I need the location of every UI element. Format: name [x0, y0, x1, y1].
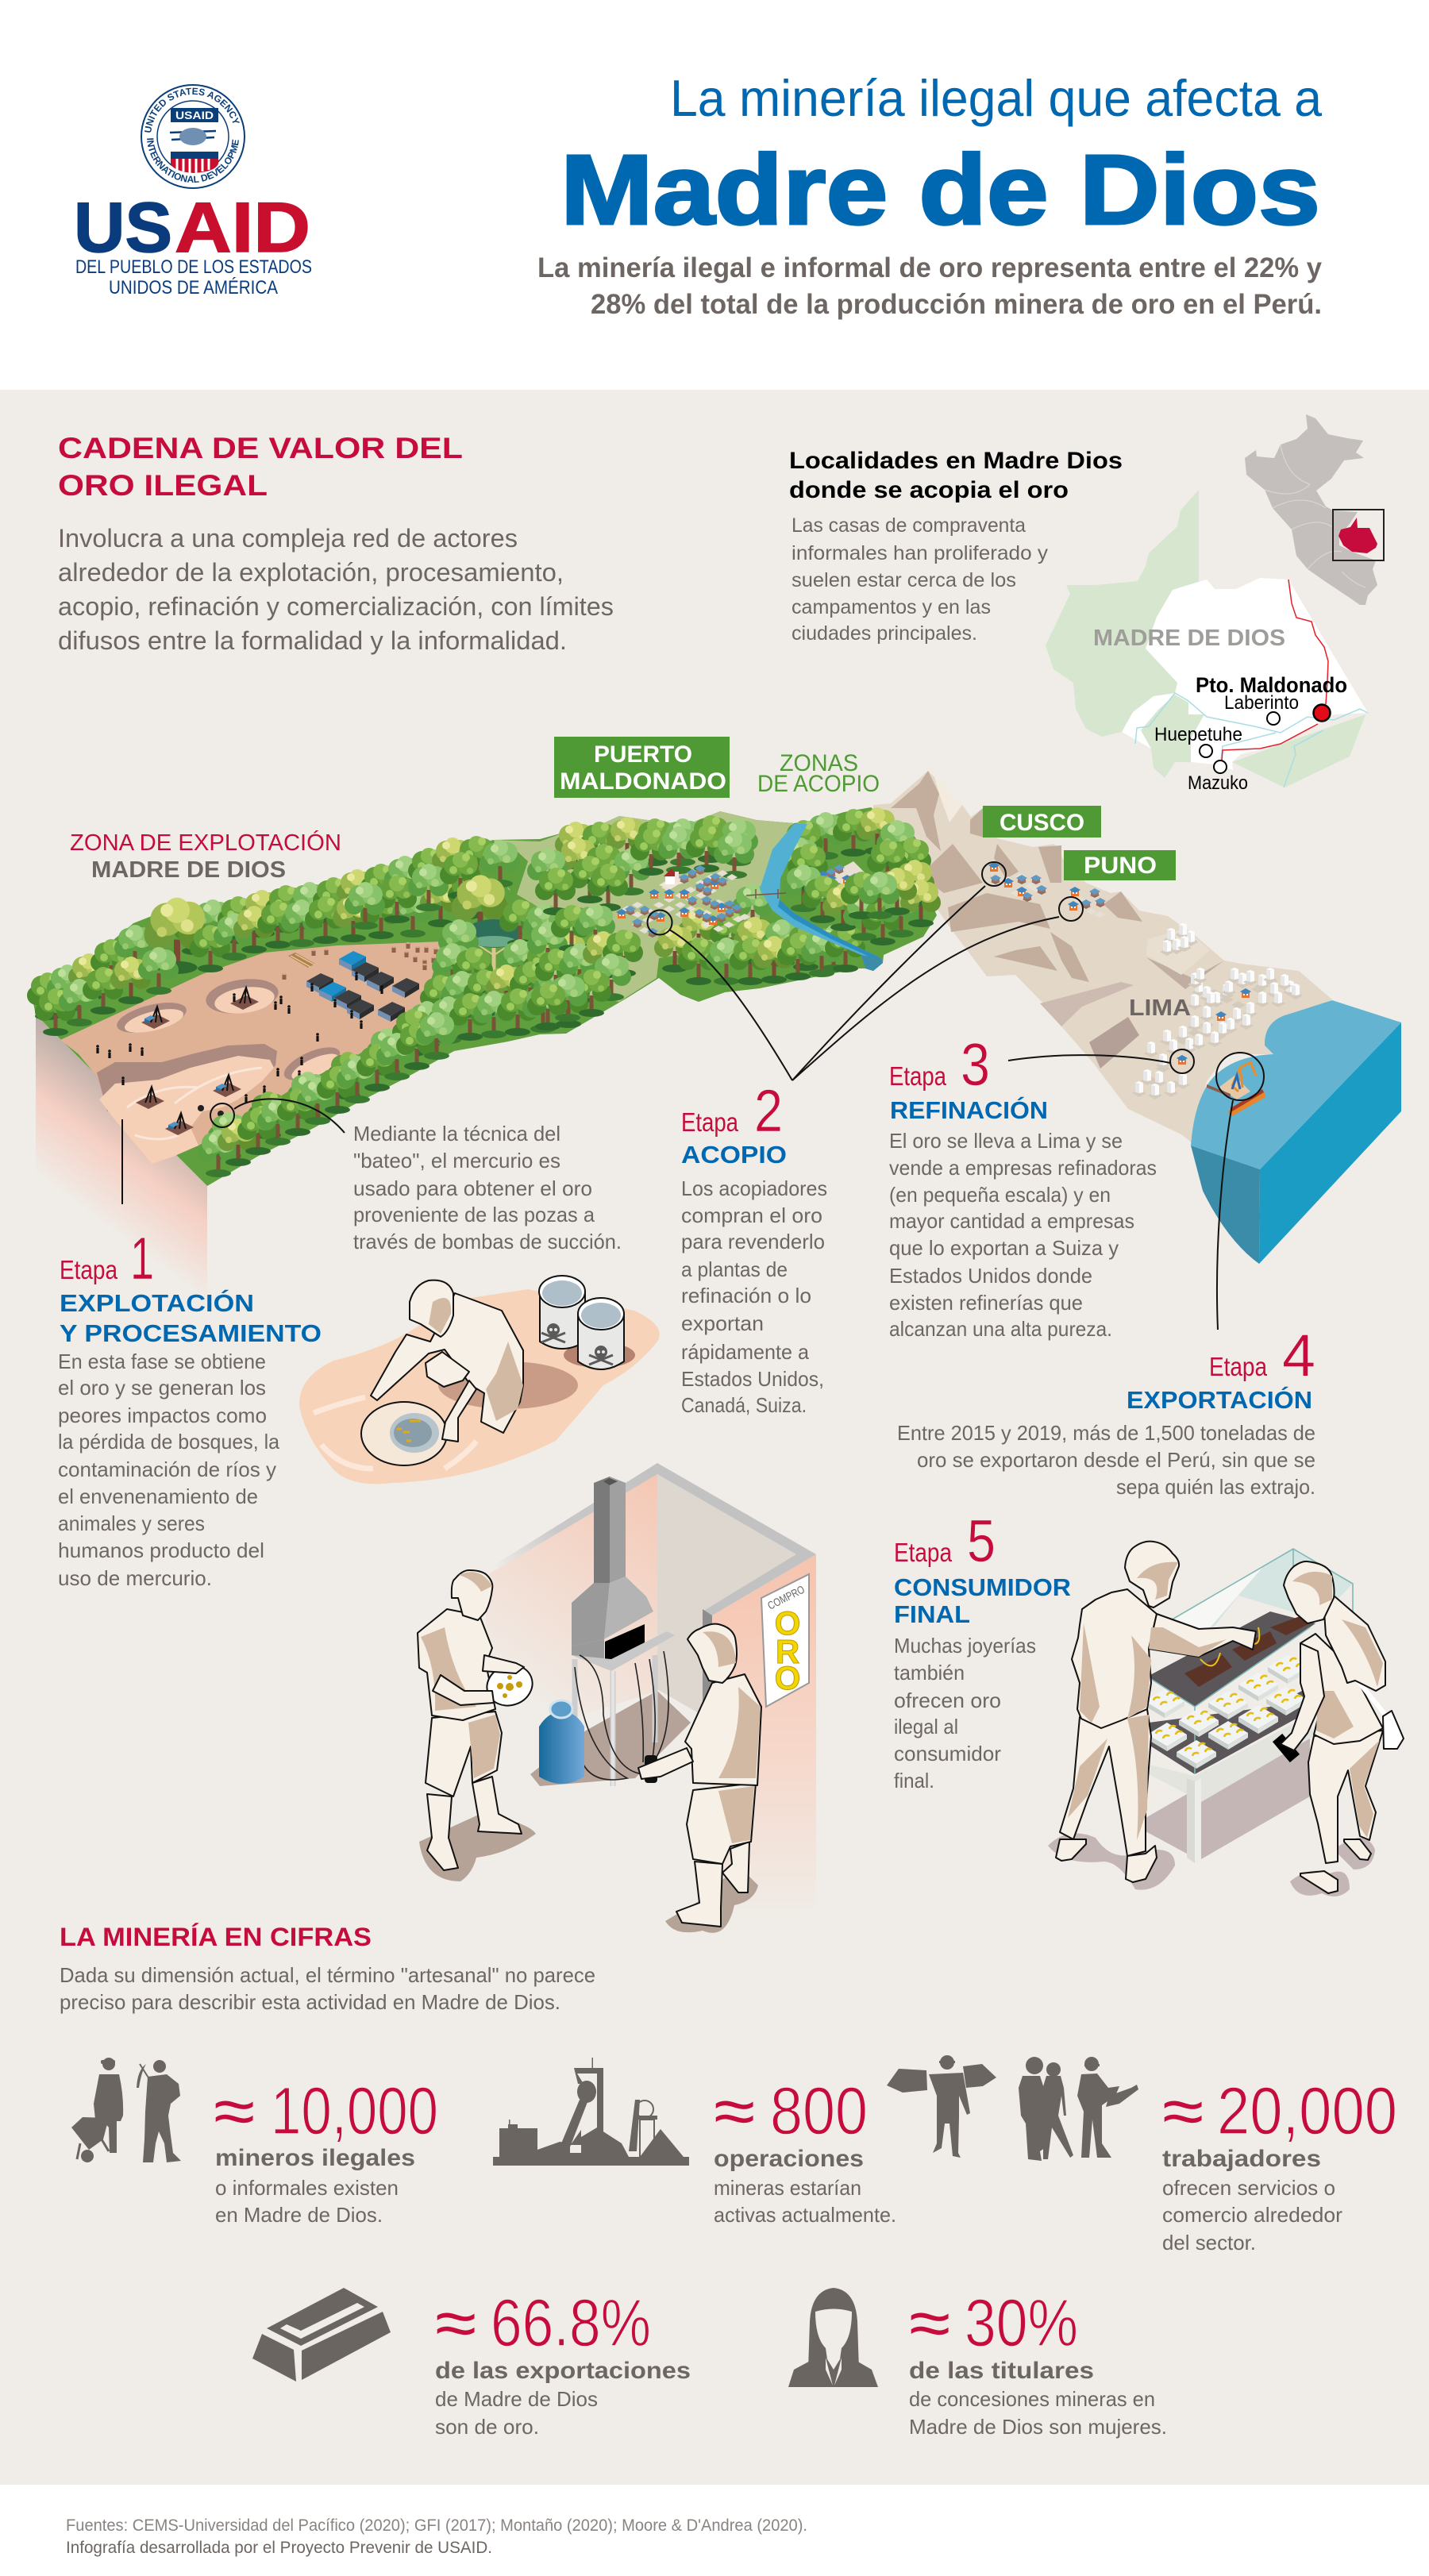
cifras intro: preciso para describir esta actividad en Madre de Dios. — [60, 1990, 560, 2014]
label: Puno: PUNO — [1084, 853, 1157, 879]
stat: 30%: de concesiones mineras en — [909, 2387, 1155, 2411]
isometric landscape — [27, 771, 1401, 1302]
cliff face — [36, 1015, 207, 1302]
title: Madre de Dios — [560, 135, 1320, 245]
floor shadow — [530, 1691, 691, 1786]
stage 5: Muchas joyerías — [894, 1634, 1036, 1658]
stage 5: ilegal al — [894, 1715, 958, 1739]
log pile and stumps — [283, 942, 438, 980]
bateo note: "bateo", el mercurio es — [353, 1149, 560, 1172]
Lima city — [1132, 923, 1303, 1099]
stage 4: oro se exportaron desde el Perú, sin que se — [917, 1448, 1315, 1472]
stage 2: para revenderlo — [681, 1230, 825, 1253]
stat: 10,000: en Madre de Dios. — [215, 2203, 383, 2227]
map label: region: MADRE DE DIOS — [1093, 626, 1285, 651]
stage 5: Etapa — [894, 1538, 953, 1567]
hoses — [575, 1651, 668, 1780]
sea block — [1191, 1000, 1401, 1264]
stat: 10,000 — [214, 2074, 438, 2227]
stage 1: uso de mercurio. — [58, 1566, 212, 1590]
stage 2: exportan — [681, 1311, 764, 1335]
localities text: campamentos y en las — [792, 596, 991, 618]
sign: R — [776, 1633, 799, 1670]
stat: 10,000: ≈ — [214, 2074, 255, 2148]
intro paragraph: acopio, refinación y comercialización, con límites — [58, 592, 614, 621]
stat: 20,000: 20,000 — [1217, 2074, 1397, 2148]
stat: 800: mineras estarían — [714, 2176, 861, 2200]
footer sources: Infografía desarrollada por el Proyecto Prevenir de USAID. — [66, 2539, 492, 2557]
localities text: informales han proliferado y — [792, 542, 1049, 564]
wordmark USAID: AID — [175, 187, 310, 267]
localities text: suelen estar cerca de los — [792, 569, 1016, 591]
stage 2: compran el oro — [681, 1203, 822, 1227]
stage 3: alcanzan una alta pureza. — [889, 1317, 1112, 1341]
stat: 800: operaciones — [714, 2146, 864, 2172]
stat: 800: activas actualmente. — [714, 2203, 896, 2227]
label: Puerto Maldonado: PUERTO — [594, 741, 692, 768]
icon: miners — [71, 2058, 181, 2162]
stage 3: existen refinerías que — [889, 1291, 1083, 1315]
stat: 66.8%: ≈ — [435, 2285, 476, 2360]
tagline: DEL PUEBLO DE LOS ESTADOS — [75, 256, 312, 278]
stage 5: ofrecen oro — [894, 1688, 1001, 1712]
man at counter — [1048, 1542, 1256, 1890]
barracks — [306, 951, 419, 1022]
wordmark USAID — [74, 187, 310, 267]
map: Peru locator — [1245, 414, 1384, 605]
label: zona de explotación — [70, 830, 341, 883]
stage 5: final. — [894, 1769, 934, 1792]
tiny miners — [96, 972, 383, 1103]
footer sources — [66, 2516, 807, 2557]
stage 5: consumidor — [894, 1742, 1001, 1765]
label: Puerto Maldonado: MALDONADO — [560, 768, 726, 795]
town labels: Pto. Maldonado — [1196, 673, 1347, 697]
stat: 20,000: comercio alrededor — [1162, 2203, 1342, 2227]
label: Cusco — [983, 806, 1101, 837]
stat: 800: ≈ — [714, 2074, 755, 2148]
counter base — [1146, 1715, 1314, 1863]
port and ship — [1207, 1062, 1265, 1116]
subtitle — [537, 252, 1323, 320]
stat: 10,000: 10,000 — [271, 2074, 438, 2148]
stage 3: REFINACIÓN — [890, 1095, 1048, 1124]
stage 1: la pérdida de bosques, la — [58, 1430, 280, 1454]
stat: 66.8%: de las exportaciones — [435, 2358, 691, 2384]
sign — [761, 1574, 809, 1707]
gas cylinder — [539, 1700, 584, 1784]
USAID logo — [74, 84, 312, 298]
intro paragraph: alrededor de la explotación, procesamiento, — [58, 558, 564, 587]
heading: la minería en cifras: LA MINERÍA EN CIFRAS — [60, 1923, 372, 1951]
mercury cans — [539, 1276, 624, 1369]
label: Puerto Maldonado — [554, 737, 730, 798]
right-bank forest and town — [780, 807, 941, 945]
town markers — [1200, 705, 1331, 773]
stage 2: refinación o lo — [681, 1284, 811, 1307]
cifras intro: Dada su dimensión actual, el término "artesanal" no parece — [60, 1963, 595, 1987]
localities heading: donde se acopia el oro — [789, 477, 1069, 503]
label: zona de explotación: MADRE DE DIOS — [91, 857, 286, 883]
forest ground — [31, 807, 937, 1186]
bateo note: través de bombas de succión. — [353, 1230, 622, 1253]
localities text — [792, 514, 1049, 645]
map: Madre de Dios region — [1046, 490, 1368, 794]
stage 3: Estados Unidos donde — [889, 1264, 1092, 1288]
stage 2: 2 — [754, 1077, 783, 1144]
stage 5: también — [894, 1661, 965, 1685]
heading: cadena de valor: CADENA DE VALOR DEL — [58, 432, 463, 464]
stage 1 — [58, 1225, 322, 1590]
heading: cadena de valor: ORO ILEGAL — [58, 469, 268, 502]
stat: 66.8% — [435, 2285, 691, 2439]
label: Puno — [1064, 850, 1176, 880]
stat: 66.8%: son de oro. — [435, 2415, 539, 2439]
stage 1: el oro y se generan los — [58, 1376, 266, 1400]
town labels: Huepetuhe — [1154, 724, 1242, 745]
stage 5: FINAL — [894, 1600, 970, 1628]
tagline — [75, 256, 312, 298]
localities heading — [789, 448, 1123, 503]
tagline: UNIDOS DE AMÉRICA — [109, 277, 278, 298]
icon: mine tower — [493, 2058, 689, 2166]
stage 4: Entre 2015 y 2019, más de 1,500 toneladas de — [897, 1421, 1315, 1445]
stat: 20,000: ≈ — [1162, 2074, 1204, 2148]
stage 4: EXPORTACIÓN — [1127, 1385, 1312, 1414]
stat: 30% — [909, 2285, 1167, 2439]
shadow — [438, 1361, 578, 1409]
Andean towns — [988, 862, 1106, 918]
subtitle: 28% del total de la producción minera de oro en el Perú. — [591, 289, 1322, 320]
town labels: Mazuko — [1188, 772, 1248, 794]
stage 1: Y PROCESAMIENTO — [60, 1319, 322, 1347]
stage 5 — [894, 1507, 1071, 1792]
illustration: jewellery counter — [1048, 1542, 1404, 1896]
worker with torch — [638, 1624, 761, 1933]
stage 1: En esta fase se obtiene — [58, 1350, 266, 1373]
pan — [361, 1402, 447, 1465]
sign: COMPRO — [765, 1583, 807, 1612]
stage 4: 4 — [1282, 1322, 1315, 1388]
wall top rim — [486, 1463, 816, 1715]
stat: 800 — [714, 2074, 896, 2227]
mining pits — [97, 975, 345, 1164]
stat: 66.8%: 66.8% — [491, 2285, 651, 2360]
olive hillside — [494, 811, 794, 1002]
stat: 20,000: trabajadores — [1162, 2146, 1321, 2172]
stat: 30%: Madre de Dios son mujeres. — [909, 2415, 1167, 2439]
callout lines — [122, 862, 1264, 1330]
mountains — [873, 771, 1332, 1143]
title — [560, 69, 1323, 245]
wordmark USAID: US — [74, 187, 172, 267]
stage 1: Etapa — [60, 1255, 118, 1284]
stage 1: humanos producto del — [58, 1538, 264, 1562]
stage 3: Etapa — [889, 1061, 947, 1091]
stage 1: animales y seres — [58, 1511, 205, 1535]
bateo note: proveniente de las pozas a — [353, 1203, 595, 1226]
label: zona de explotación: ZONA DE EXPLOTACIÓN — [70, 830, 341, 856]
stage 4 — [897, 1322, 1315, 1499]
stage 2: ACOPIO — [681, 1141, 787, 1169]
intro paragraph: difusos entre la formalidad y la informalidad. — [58, 626, 567, 655]
bateo note — [353, 1122, 622, 1253]
stat: 800: 800 — [770, 2074, 868, 2148]
stage 4: Etapa — [1209, 1352, 1268, 1381]
stat: 10,000: mineros ilegales — [215, 2145, 415, 2171]
front forest strip — [198, 899, 598, 1177]
town labels: Laberinto — [1224, 692, 1299, 714]
intro paragraph: Involucra a una compleja red de actores — [58, 524, 518, 553]
glass case — [1145, 1549, 1353, 1774]
stat: 30%: ≈ — [909, 2285, 950, 2360]
stage 2: Etapa — [681, 1107, 739, 1137]
woman at counter — [1273, 1561, 1404, 1896]
pink walls — [486, 1473, 657, 1746]
stage 3: que lo exportan a Suiza y — [889, 1236, 1119, 1260]
icon: gold bar — [252, 2288, 391, 2382]
panning man — [371, 1280, 523, 1442]
stage 3: mayor cantidad a empresas — [889, 1209, 1134, 1233]
stat: 10,000: o informales existen — [215, 2176, 399, 2200]
mid forest — [527, 815, 865, 1030]
back forest strip — [27, 836, 520, 1036]
localities text: Las casas de compraventa — [792, 514, 1026, 537]
intro paragraph — [58, 524, 614, 655]
inset box: Madre de Dios — [1333, 510, 1384, 560]
stat: 30%: 30% — [965, 2285, 1078, 2360]
subtitle: La minería ilegal e informal de oro representa entre el 22% y — [537, 252, 1323, 283]
label: zonas de acopio: ZONAS — [780, 750, 858, 776]
sign: O — [775, 1604, 800, 1642]
clearing and mine ground — [60, 941, 443, 1164]
chimney and hood — [572, 1477, 653, 1663]
stage 1: contaminación de ríos y — [58, 1457, 276, 1481]
river — [746, 824, 883, 971]
seal: UNITED STATES AGENCY — [144, 87, 240, 133]
stage 2: Canadá, Suiza. — [681, 1393, 807, 1417]
stage 1: el envenenamiento de — [58, 1484, 258, 1508]
seal — [141, 84, 245, 189]
stage 5: 5 — [967, 1507, 996, 1574]
bateo note: Mediante la técnica del — [353, 1122, 560, 1146]
stage 3: El oro se lleva a Lima y se — [889, 1129, 1123, 1153]
footer sources: Fuentes: CEMS-Universidad del Pacífico (2020); GFI (2017); Montaño (2020); Moore & D'Andrea (2020). — [66, 2516, 807, 2535]
stage 3 — [889, 1031, 1157, 1341]
stage 2: Estados Unidos, — [681, 1367, 824, 1391]
stage 2: rápidamente a — [681, 1340, 810, 1364]
stage 1: 1 — [130, 1225, 154, 1292]
localities heading: Localidades en Madre Dios — [789, 448, 1123, 474]
stage 3: (en pequeña escala) y en — [889, 1183, 1111, 1207]
road — [1222, 580, 1328, 760]
title: La minería ilegal que afecta a — [670, 69, 1323, 127]
label: Lima: LIMA — [1129, 995, 1191, 1021]
bateo note: usado para obtener el oro — [353, 1176, 592, 1200]
illustration: gold panning — [299, 1276, 660, 1484]
icon: woman — [788, 2288, 878, 2387]
stage 5: CONSUMIDOR — [894, 1573, 1071, 1601]
stage 2: Los acopiadores — [681, 1176, 827, 1200]
localities text: ciudades principales. — [792, 622, 977, 645]
seal: USAID — [175, 109, 214, 121]
stat: 30%: de las titulares — [909, 2358, 1094, 2384]
sign: O — [775, 1659, 800, 1696]
table — [572, 1631, 675, 1786]
stage 1: EXPLOTACIÓN — [60, 1288, 254, 1317]
stage 2 — [681, 1077, 827, 1417]
heading: cadena de valor — [58, 432, 463, 502]
stage 3: 3 — [961, 1031, 990, 1098]
stat: 20,000 — [1162, 2074, 1397, 2254]
stat: 66.8%: de Madre de Dios — [435, 2387, 598, 2411]
stage 1: peores impactos como — [58, 1404, 267, 1427]
icon: workers — [887, 2055, 1138, 2161]
stage 4: sepa quién las extrajo. — [1116, 1475, 1315, 1499]
stage 2: a plantas de — [681, 1257, 788, 1281]
pump rigs — [136, 988, 259, 1135]
label: zonas de acopio: DE ACOPIO — [757, 771, 880, 797]
stat: 20,000: del sector. — [1162, 2231, 1256, 2254]
town labels — [1154, 673, 1347, 794]
illustration: furnace room — [418, 1463, 816, 1961]
stat: 20,000: ofrecen servicios o — [1162, 2176, 1335, 2200]
label: Cusco: CUSCO — [1000, 810, 1084, 836]
label: zonas de acopio — [757, 750, 880, 797]
cifras intro — [60, 1963, 595, 2014]
stage 3: vende a empresas refinadoras — [889, 1156, 1157, 1180]
worker holding plate — [418, 1570, 538, 1881]
town: Puerto Maldonado — [616, 865, 750, 938]
